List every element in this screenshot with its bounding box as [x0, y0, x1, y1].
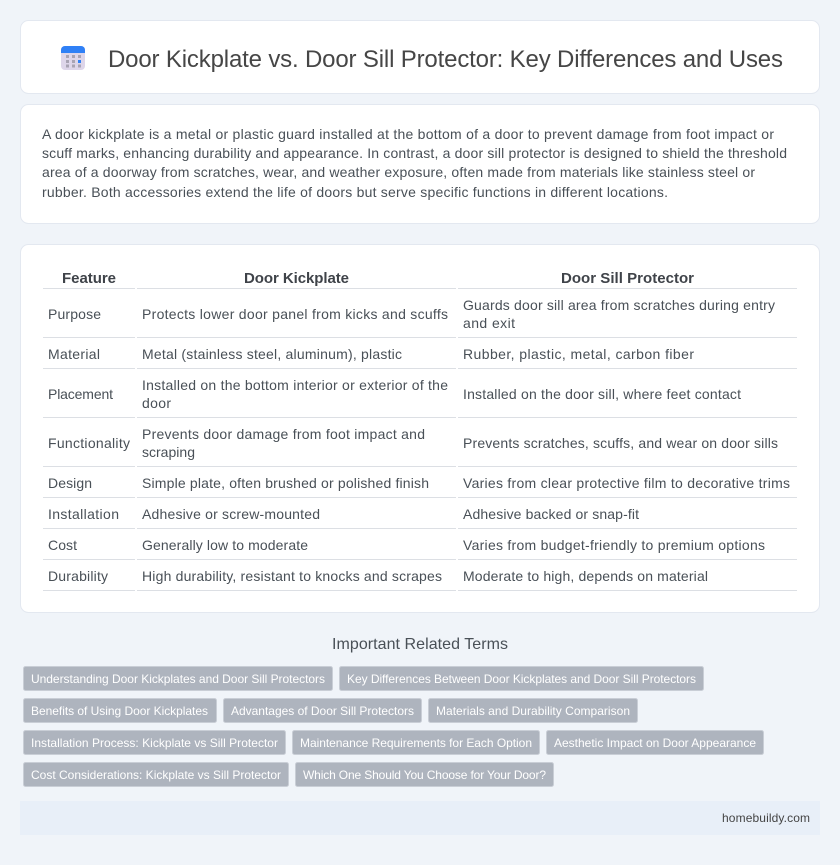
tag: which one	[296, 762, 554, 786]
title: Door Kickplate vs. Door Sill Protector: Key Differences and Uses	[108, 46, 783, 73]
row: functionality: Prevents scratches, scuffs, and wear on door sills	[463, 435, 778, 451]
table header: Door Sill Protector	[561, 270, 694, 287]
tag: understanding	[24, 666, 332, 690]
table header	[62, 270, 694, 287]
tag: benefits	[24, 698, 216, 722]
row: placement	[48, 377, 741, 411]
row: design: Simple plate, often brushed or polished finish	[142, 475, 429, 491]
row: installation: Adhesive or screw-mounted	[142, 506, 320, 522]
tag: aesthetic	[546, 730, 764, 754]
tag: understanding: Understanding Door Kickplates and Door Sill Protectors	[31, 672, 325, 686]
tag: installation: Installation Process: Kickplate vs Sill Protector	[31, 736, 278, 750]
row: durability: High durability, resistant to knocks and scrapes	[142, 568, 442, 584]
row: cost: Cost	[48, 537, 77, 553]
tag: which one: Which One Should You Choose for Your Door?	[303, 768, 546, 782]
row: functionality: Functionality	[48, 435, 130, 451]
intro panel	[20, 104, 820, 224]
tag: advantages	[224, 698, 422, 722]
intro text: rubber. Both accessories extend the life of doors but serve specific functions in different locations.	[42, 184, 668, 200]
row: purpose: Guards door sill area from scratches during entry	[463, 297, 775, 313]
row: installation	[48, 506, 639, 522]
tag: aesthetic: Aesthetic Impact on Door Appearance	[554, 736, 756, 750]
header panel	[20, 20, 820, 94]
row: durability: Moderate to high, depends on material	[463, 568, 708, 584]
tag: cost	[24, 762, 288, 786]
row: functionality: scraping	[142, 444, 195, 460]
row: functionality	[48, 426, 778, 460]
row: purpose: Purpose	[48, 306, 101, 322]
related terms heading: Important Related Terms	[332, 636, 508, 653]
tag: benefits: Benefits of Using Door Kickplates	[31, 704, 208, 718]
table rule lines	[43, 288, 797, 590]
row: cost: Varies from budget-friendly to premium options	[463, 537, 765, 553]
row: purpose	[48, 297, 775, 331]
row: material: Rubber, plastic, metal, carbon fiber	[463, 346, 694, 362]
row: installation: Installation	[48, 506, 119, 522]
comparison table panel	[20, 244, 820, 612]
footer	[20, 801, 820, 835]
tag: installation	[24, 730, 286, 754]
intro text: area of a doorway from scratches, wear, and weather exposure, often made from materials like stainless steel or	[42, 164, 755, 180]
row: installation: Adhesive backed or snap-fit	[463, 506, 639, 522]
row: material	[48, 346, 694, 362]
tag: cost: Cost Considerations: Kickplate vs Sill Protector	[31, 768, 281, 782]
row: placement: Placement	[48, 386, 113, 402]
row: purpose: Protects lower door panel from kicks and scuffs	[142, 306, 448, 322]
row: material: Material	[48, 346, 100, 362]
table header: Feature	[62, 270, 116, 287]
intro text: A door kickplate is a metal or plastic guard installed at the bottom of a door to prevent damage from foot impact or	[42, 126, 774, 142]
tag: maintenance: Maintenance Requirements for Each Option	[300, 736, 532, 750]
tag: maintenance	[292, 730, 540, 754]
table header: Door Kickplate	[244, 270, 349, 287]
row: cost: Generally low to moderate	[142, 537, 308, 553]
row: design: Varies from clear protective film to decorative trims	[463, 475, 790, 491]
tag: key differences	[340, 666, 704, 690]
intro text	[42, 126, 787, 200]
row: durability: Durability	[48, 568, 108, 584]
tag: materials	[428, 698, 638, 722]
tag: key differences: Key Differences Between Door Kickplates and Door Sill Protectors	[347, 672, 696, 686]
row: material: Metal (stainless steel, aluminum), plastic	[142, 346, 402, 362]
tag: materials: Materials and Durability Comparison	[436, 704, 630, 718]
row: placement: door	[142, 395, 171, 411]
intro text: scuff marks, enhancing durability and appearance. In contrast, a door sill protector is designed to shield the threshold	[42, 145, 787, 161]
related terms tags	[24, 666, 764, 786]
row: placement: Installed on the door sill, where feet contact	[463, 386, 741, 402]
row: design	[48, 475, 790, 491]
row: design: Design	[48, 475, 92, 491]
row: purpose: and exit	[463, 315, 515, 331]
row: cost	[48, 537, 765, 553]
icon: calendar	[61, 46, 85, 70]
row: placement: Installed on the bottom interior or exterior of the	[142, 377, 448, 393]
row: durability	[48, 568, 708, 584]
footer: homebuildy.com	[722, 811, 810, 825]
row: functionality: Prevents door damage from foot impact and	[142, 426, 425, 442]
tag: advantages: Advantages of Door Sill Protectors	[231, 704, 414, 718]
